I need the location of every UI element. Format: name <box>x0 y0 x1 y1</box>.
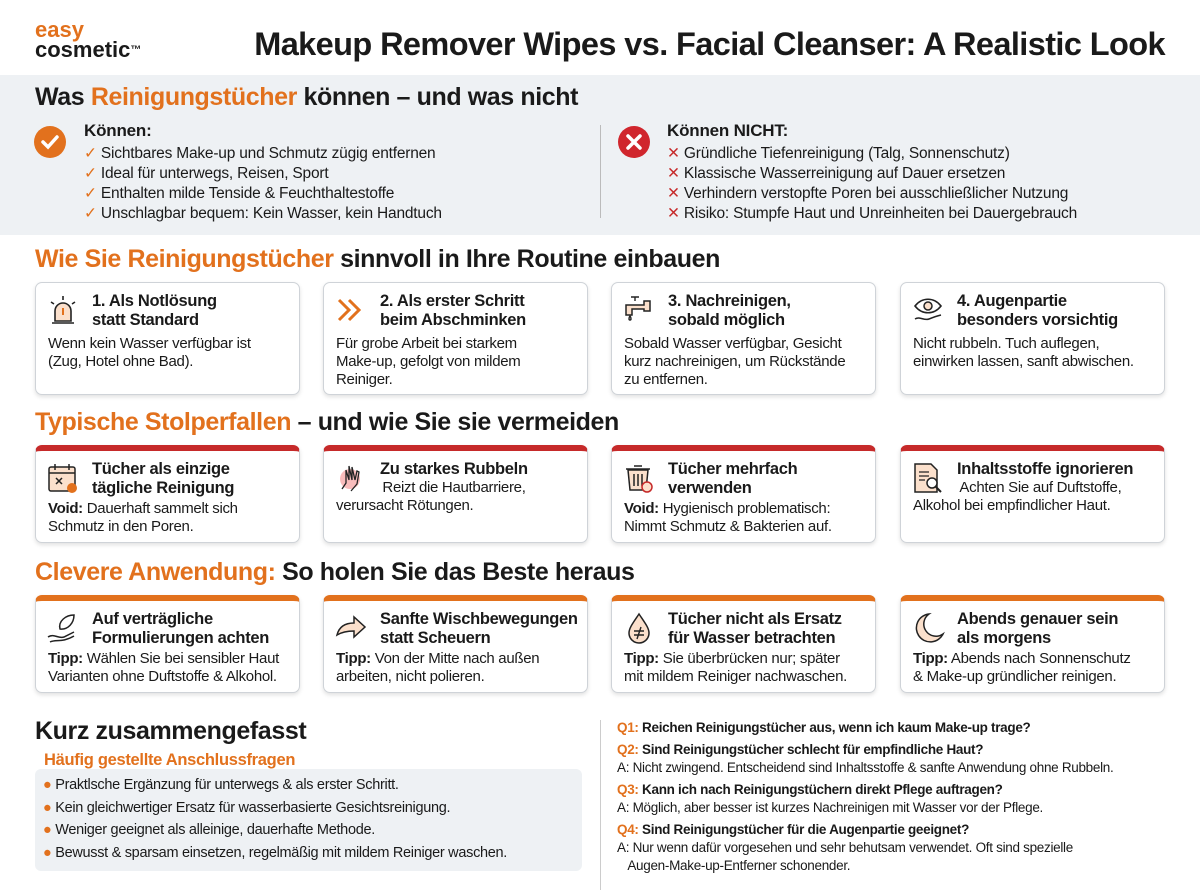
faq: Q4: Sind Reinigungstücher für die Augenpartie geeignet? <box>617 822 969 837</box>
list: können: ✓ Ideal für unterwegs, Reisen, Sport <box>84 165 328 182</box>
card: inhaltsstoffe: Alkohol bei empfindlicher Haut. <box>913 497 1110 514</box>
heading: stolperfallen: Typische Stolperfallen – und wie Sie sie vermeiden <box>35 408 619 436</box>
card: Notlösung: statt Standard <box>92 311 199 329</box>
card: augenpartie <box>900 282 1165 395</box>
card: wischbewegungen: statt Scheuern <box>380 629 490 647</box>
card: einzige Reinigung: Void: Dauerhaft sammelt sich <box>48 500 238 517</box>
card: rubbeln: Zu starkes Rubbeln <box>380 460 528 478</box>
card: erster Schritt: 2. Als erster Schritt <box>380 292 524 310</box>
list: können nicht: ✕ Verhindern verstopfte Poren bei ausschließlicher Nutzung <box>667 185 1068 202</box>
icon: moon <box>916 613 945 643</box>
card: kein ersatz <box>611 595 876 693</box>
icon: document search <box>914 463 942 493</box>
icon: drop <box>628 612 650 644</box>
card: mehrfach: Tücher mehrfach <box>668 460 797 478</box>
card: einzige Reinigung: Tücher als einzige <box>92 460 230 478</box>
card: abends: als morgens <box>957 629 1051 647</box>
card: wischbewegungen: Tipp: Von der Mitte nach außen <box>336 650 539 667</box>
card: nachreinigen: zu entfernen. <box>624 371 708 388</box>
list: können nicht: ✕ Gründliche Tiefenreinigung (Talg, Sonnenschutz) <box>667 145 1010 162</box>
summary box: ● Kein gleichwertiger Ersatz für wasserbasierte Gesichtsreinigung. <box>43 800 450 816</box>
card: abends: Tipp: Abends nach Sonnenschutz <box>913 650 1131 667</box>
logo: easy <box>35 17 84 42</box>
card: augenpartie: Nicht rubbeln. Tuch auflegen, <box>913 335 1099 352</box>
card: erster Schritt: Reiniger. <box>336 371 393 388</box>
heading: clevere anwendung: Clevere Anwendung: So holen Sie das Beste heraus <box>35 558 634 586</box>
heading: Was Reinigungstücher können – und was nicht <box>35 83 578 111</box>
card: augenpartie: besonders vorsichtig <box>957 311 1118 329</box>
icon: chevrons <box>338 299 361 321</box>
card: nachreinigen: Sobald Wasser verfügbar, Gesicht <box>624 335 841 352</box>
card: rubbeln: verursacht Rötungen. <box>336 497 473 514</box>
faq: Q1: Reichen Reinigungstücher aus, wenn ich kaum Make-up trage? <box>617 720 1030 735</box>
icon: eye <box>914 298 942 320</box>
list: können: ✓ Enthalten milde Tenside & Feuchthaltestoffe <box>84 185 394 202</box>
title: Makeup Remover Wipes vs. Facial Cleanser: A Realistic Look <box>254 26 1165 62</box>
faq: A: Nur wenn dafür vorgesehen und sehr behutsam verwendet. Oft sind spezielle <box>617 840 1073 855</box>
list: können nicht <box>667 121 1077 222</box>
card: einzige Reinigung <box>35 445 300 543</box>
icon: leaf hand <box>48 614 75 643</box>
faq: A: Nicht zwingend. Entscheidend sind Inhaltsstoffe & sanfte Anwendung ohne Rubbeln. <box>617 760 1113 775</box>
card: rubbeln: Reizt die Hautbarriere, <box>382 479 526 496</box>
summary box: ● Bewusst & sparsam einsetzen, regelmäßig mit mildem Reiniger waschen. <box>43 844 507 860</box>
card: kein ersatz: für Wasser betrachten <box>668 629 835 647</box>
summary box: ● Weniger geeignet als alleinige, dauerhafte Methode. <box>43 822 375 838</box>
card: rubbeln <box>323 445 588 543</box>
faq: Q2: Sind Reinigungstücher schlecht für empfindliche Haut? <box>617 742 983 757</box>
card: abends <box>900 595 1165 693</box>
card: inhaltsstoffe <box>900 445 1165 543</box>
list: können: ✓ Unschlagbar bequem: Kein Wasser, kein Handtuch <box>84 205 442 222</box>
card: mehrfach: verwenden <box>668 479 752 497</box>
faq: A: Möglich, aber besser ist kurzes Nachreinigen mit Wasser vor der Pflege. <box>617 800 1043 815</box>
card: Notlösung: 1. Als Notlösung <box>92 292 217 310</box>
icon: check circle <box>34 126 66 158</box>
faq <box>617 720 1113 873</box>
card: inhaltsstoffe: Achten Sie auf Duftstoffe, <box>959 479 1121 496</box>
list: können nicht: ✕ Risiko: Stumpfe Haut und Unreinheiten bei Dauergebrauch <box>667 205 1077 222</box>
card: einzige Reinigung: Schmutz in den Poren. <box>48 518 193 535</box>
card: kein ersatz: mit mildem Reiniger nachwaschen. <box>624 668 847 685</box>
card: Notlösung: (Zug, Hotel ohne Bad). <box>48 353 193 370</box>
card: mehrfach: Nimmt Schmutz & Bakterien auf. <box>624 518 832 535</box>
list: können nicht: Können NICHT: <box>667 121 788 140</box>
list: können nicht: ✕ Klassische Wasserreinigung auf Dauer ersetzen <box>667 165 1005 182</box>
card: Notlösung: Wenn kein Wasser verfügbar ist <box>48 335 251 352</box>
card: augenpartie: 4. Augenpartie <box>957 292 1067 310</box>
card: kein ersatz: Tipp: Sie überbrücken nur; später <box>624 650 840 667</box>
icon: calendar <box>48 464 77 493</box>
card: nachreinigen: kurz nachreinigen, um Rückstände <box>624 353 845 370</box>
card: mehrfach: Void: Hygienisch problematisch: <box>624 500 830 517</box>
card: formulierungen: Tipp: Wählen Sie bei sensibler Haut <box>48 650 279 667</box>
list: können: ✓ Sichtbares Make-up und Schmutz zügig entfernen <box>84 145 435 162</box>
icon: tap <box>625 296 651 321</box>
heading: routine: Wie Sie Reinigungstücher sinnvoll in Ihre Routine einbauen <box>35 245 720 273</box>
card: einzige Reinigung: tägliche Reinigung <box>92 479 234 497</box>
card: nachreinigen <box>611 282 876 395</box>
card: nachreinigen: sobald möglich <box>668 311 785 329</box>
logo: cosmetic™ <box>35 37 141 62</box>
icon: red hand <box>340 466 360 492</box>
card: Notlösung <box>35 282 300 395</box>
card: erster Schritt: Make-up, gefolgt von mildem <box>336 353 520 370</box>
list: können <box>84 121 442 222</box>
panel: what wipes can and cannot <box>0 75 1200 235</box>
card: formulierungen: Formulierungen achten <box>92 629 269 647</box>
icon: arrow <box>336 615 366 639</box>
card: abends: Abends genauer sein <box>957 610 1118 628</box>
faq: Q3: Kann ich nach Reinigungstüchern direkt Pflege auftragen? <box>617 782 1003 797</box>
heading: kurz zusammengefasst: Kurz zusammengefasst <box>35 717 306 745</box>
card: nachreinigen: 3. Nachreinigen, <box>668 292 791 310</box>
icon: bin <box>626 465 653 493</box>
card: wischbewegungen: arbeiten, nicht polieren. <box>336 668 484 685</box>
card: abends: & Make-up gründlicher reinigen. <box>913 668 1116 685</box>
list: können: Können: <box>84 121 152 140</box>
icon: x circle <box>618 126 650 158</box>
card: wischbewegungen <box>323 595 588 693</box>
card: erster Schritt: Für grobe Arbeit bei starkem <box>336 335 517 352</box>
summary box: ● Praktlsche Ergänzung für unterwegs & als erster Schritt. <box>43 777 399 793</box>
card: mehrfach <box>611 445 876 543</box>
faq: Augen-Make-up-Entferner schonender. <box>627 858 850 873</box>
card: formulierungen: Auf verträgliche <box>92 610 213 628</box>
card: erster Schritt <box>323 282 588 395</box>
summary box <box>35 769 582 871</box>
card: erster Schritt: beim Abschminken <box>380 311 526 329</box>
card: formulierungen: Varianten ohne Duftstoffe & Alkohol. <box>48 668 277 685</box>
icon: alarm <box>50 296 76 324</box>
card: formulierungen <box>35 595 300 693</box>
card: augenpartie: einwirken lassen, sanft abwischen. <box>913 353 1134 370</box>
logo <box>35 17 141 62</box>
card: kein ersatz: Tücher nicht als Ersatz <box>668 610 842 628</box>
subheading: Häufig gestellte Anschlussfragen <box>44 751 295 769</box>
card: wischbewegungen: Sanfte Wischbewegungen <box>380 610 578 628</box>
card: inhaltsstoffe: Inhaltsstoffe ignorieren <box>957 460 1133 478</box>
